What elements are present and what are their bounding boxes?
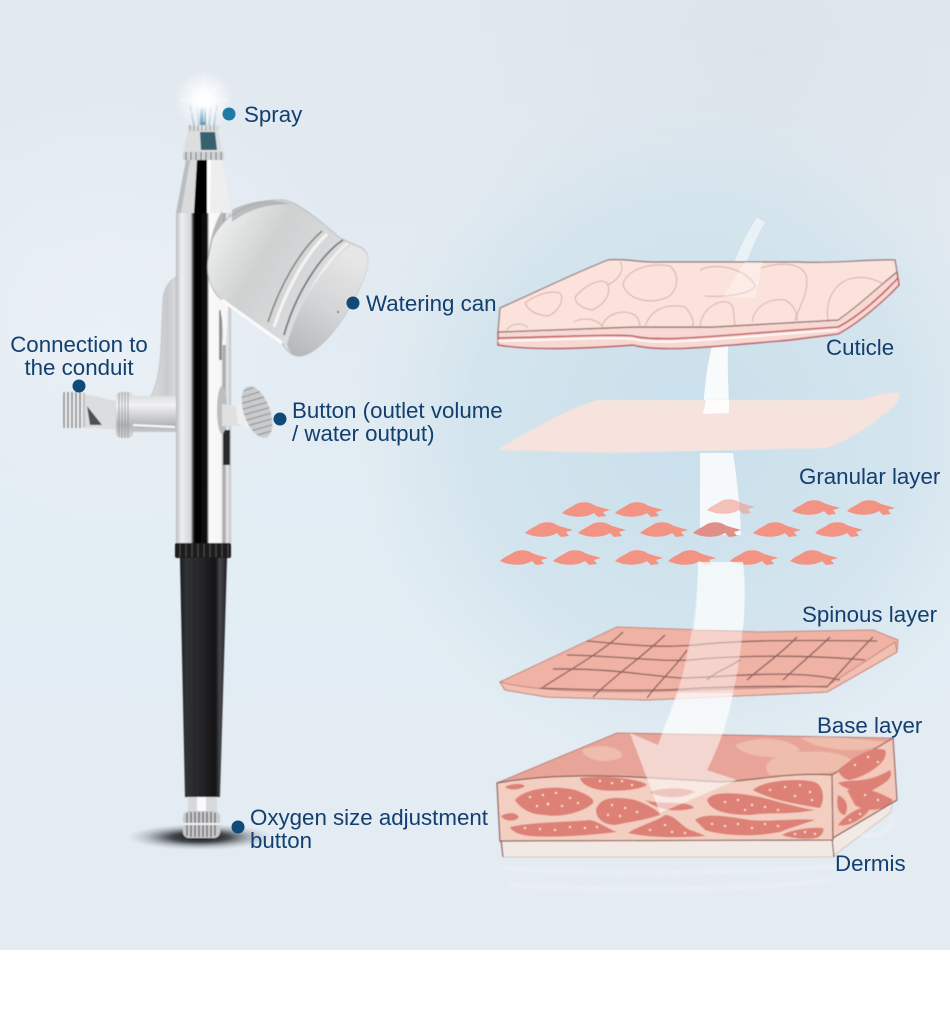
label: oxygen size adjustment button bbox=[232, 805, 489, 853]
label: oxygen size adjustment button: Oxygen size adjustment bbox=[250, 805, 489, 830]
label: watering can: Watering can bbox=[366, 291, 497, 316]
nozzle tip bbox=[183, 105, 224, 160]
arrowhead over base bbox=[630, 693, 737, 813]
rear arm bbox=[150, 277, 176, 432]
arrow upper bright stem bbox=[694, 562, 745, 630]
label: connection to the conduit bbox=[10, 332, 148, 392]
arrow lower curve over spinous bbox=[630, 562, 744, 813]
muscle cells bbox=[501, 749, 893, 839]
pen body bbox=[176, 207, 231, 545]
arrow segment 3 bbox=[700, 453, 741, 535]
arrow over cuticle bbox=[723, 262, 763, 298]
spinous grid lines bbox=[540, 632, 877, 698]
spray glow bbox=[174, 70, 234, 130]
label: button: Button (outlet volume bbox=[292, 398, 503, 423]
cuticle top surface bbox=[498, 260, 897, 332]
dermis slab bbox=[500, 795, 895, 857]
outlet volume button bbox=[216, 386, 273, 438]
watering can bbox=[208, 200, 368, 356]
label: spinous layer: Spinous layer bbox=[802, 602, 938, 627]
upper taper bbox=[176, 160, 231, 213]
block reflection bbox=[503, 815, 892, 889]
conduit connector bbox=[63, 392, 178, 438]
label: button bbox=[274, 398, 503, 446]
dermis line on side bbox=[833, 800, 897, 838]
front face bbox=[497, 774, 833, 841]
black handle bbox=[180, 558, 227, 797]
arrow segment 1 bbox=[723, 218, 765, 298]
base layer block bbox=[497, 733, 897, 857]
arrow segment over sheet bbox=[703, 400, 729, 414]
label: oxygen size adjustment button: button bbox=[250, 828, 312, 853]
black ring bbox=[175, 543, 231, 558]
cuticle layer bbox=[498, 260, 899, 349]
label: spray: Spray bbox=[244, 102, 303, 127]
granular cells bbox=[500, 499, 895, 565]
label: dermis: Dermis bbox=[835, 851, 906, 876]
label: base layer: Base layer bbox=[817, 713, 923, 738]
label: cuticle: Cuticle bbox=[826, 335, 894, 360]
oxygen adjustment knob bbox=[183, 797, 220, 838]
cuticle cell outlines bbox=[507, 262, 885, 330]
label: connection to the conduit: the conduit bbox=[24, 355, 134, 380]
airbrush pen bbox=[63, 70, 368, 850]
cell dots bbox=[524, 756, 879, 835]
spinous layer bbox=[500, 627, 898, 700]
granular sheet bbox=[497, 393, 900, 453]
label: granular layer: Granular layer bbox=[799, 464, 941, 489]
label: connection to the conduit: Connection to bbox=[10, 332, 148, 357]
white arrow top segments bbox=[700, 218, 765, 535]
output groove bbox=[219, 300, 230, 465]
pen base shadow bbox=[128, 824, 272, 850]
label: button: / water output) bbox=[292, 421, 435, 446]
top face bbox=[497, 733, 893, 783]
arrow segment 2 bbox=[703, 345, 729, 414]
side face bbox=[832, 738, 897, 838]
